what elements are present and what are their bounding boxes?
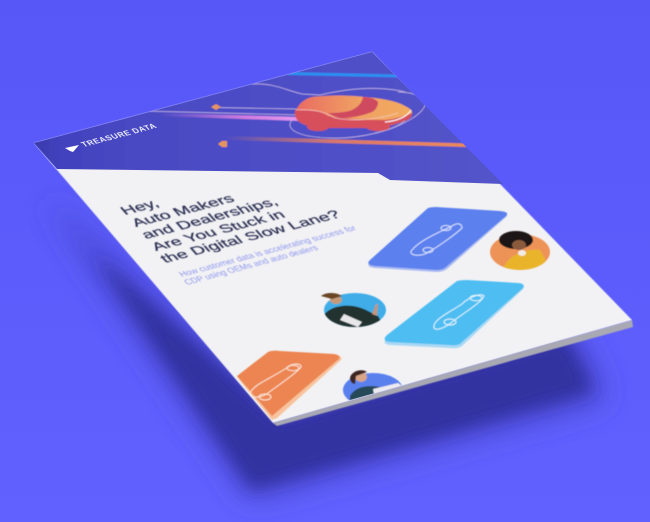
phone card: blue — [368, 207, 507, 272]
circuit lines — [143, 84, 425, 138]
title: the Digital Slow Lane? — [157, 208, 344, 266]
logo wordmark: TREASURE DATA — [79, 121, 159, 149]
title: Auto Makers — [128, 192, 238, 230]
phone card: orange — [237, 351, 341, 420]
icon: logo diamond — [65, 145, 79, 152]
icon: car outline — [250, 364, 301, 400]
person: woman in yellow — [490, 231, 552, 272]
drop shadow under brochure — [45, 195, 605, 498]
blue stripe — [288, 72, 400, 78]
person: woman at bottom — [342, 369, 402, 400]
title: Are You Stuck in — [148, 208, 288, 254]
orange markers — [211, 104, 221, 110]
title: and Dealerships, — [138, 195, 281, 242]
logo: Treasure Data — [65, 121, 159, 152]
pink stripe — [160, 113, 300, 121]
title: Hey, — [117, 197, 162, 218]
phone card: light blue — [385, 280, 524, 348]
brochure page — [34, 52, 632, 423]
subtitle: CDP using OEMs and auto dealers — [182, 243, 321, 287]
icon: car outline — [434, 295, 484, 329]
header band — [30, 50, 510, 190]
car illustration — [295, 96, 412, 131]
orange stripe — [225, 136, 467, 147]
subtitle: How customer data is accelerating success for — [177, 224, 358, 279]
brochure page edge — [273, 320, 633, 426]
title — [117, 192, 344, 266]
icon: car outline — [411, 224, 462, 255]
person: man with phone — [321, 293, 386, 332]
